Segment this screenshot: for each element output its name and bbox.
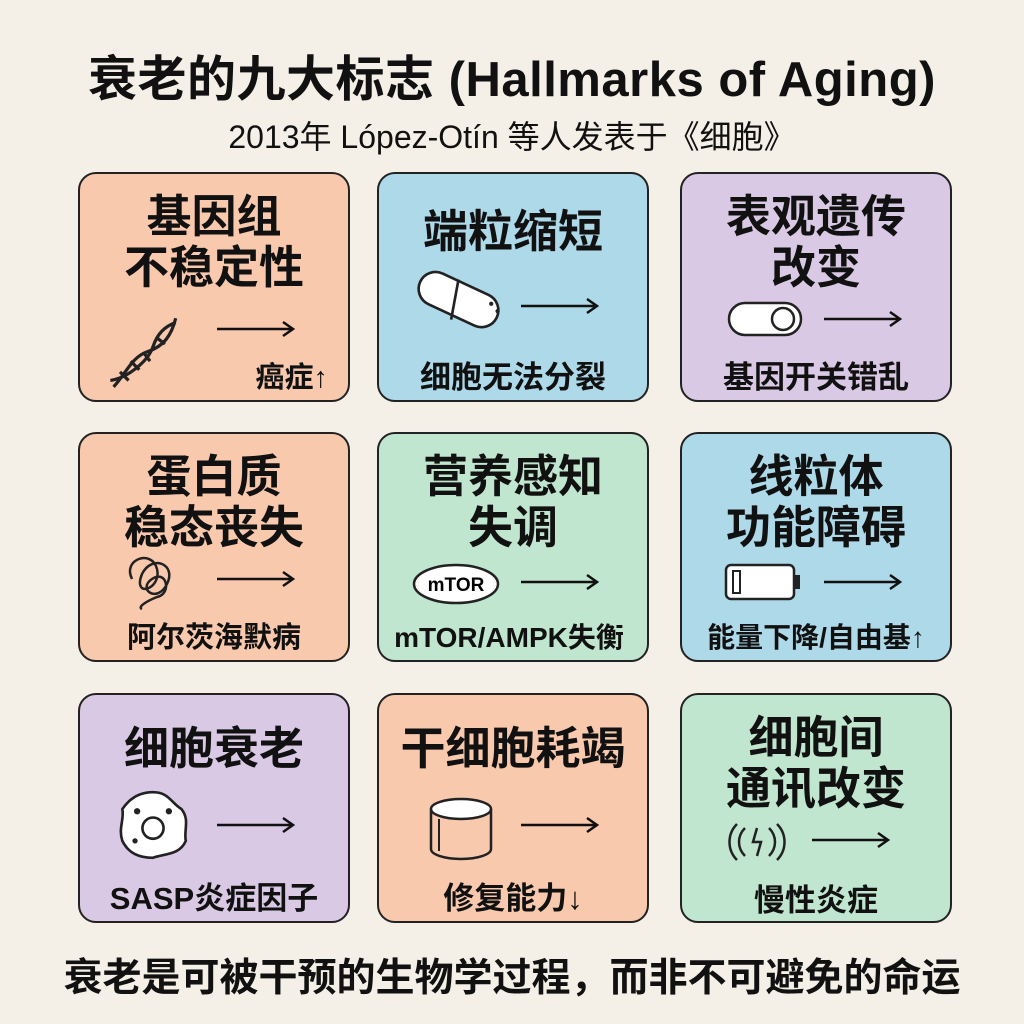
heading: 稳态丧失: [124, 502, 304, 553]
text: 能量下降/自由基↑: [707, 622, 925, 653]
panel: genome instability: [78, 172, 350, 402]
heading: 改变: [771, 242, 861, 293]
text: 修复能力↓: [443, 881, 583, 916]
heading: 线粒体: [748, 451, 884, 502]
text: 慢性炎症: [754, 883, 878, 918]
arrow: [824, 311, 902, 327]
arrow: [824, 574, 902, 590]
arrow: [217, 321, 296, 337]
heading: 细胞间: [748, 712, 884, 763]
panel: senescence: [78, 693, 350, 923]
footer statement: 衰老是可被干预的生物学过程，而非不可避免的命运: [63, 957, 960, 1000]
arrow: [812, 832, 890, 848]
text: SASP炎症因子: [110, 881, 318, 916]
text: 基因开关错乱: [723, 360, 909, 395]
title: 衰老的九大标志 (Hallmarks of Aging): [88, 53, 936, 107]
arrow: [521, 817, 600, 833]
subtitle: 2013年 López-Otín 等人发表于《细胞》: [228, 119, 796, 155]
icon: battery: [724, 564, 800, 600]
panel: stem cell exhaustion: [377, 693, 649, 923]
icon: capsule: [417, 270, 500, 328]
text: 细胞无法分裂: [420, 360, 606, 395]
panel: intercellular communication: [680, 693, 952, 923]
arrow: [521, 298, 600, 314]
arrow: [217, 817, 296, 833]
panel: epigenetic: [680, 172, 952, 402]
text: 癌症↑: [255, 362, 328, 394]
heading: 蛋白质: [146, 451, 282, 502]
panel: telomere: [377, 172, 649, 402]
icon: signal waves: [728, 823, 786, 861]
heading: 通讯改变: [726, 763, 906, 814]
icon: mTOR oval: mTOR: [428, 575, 485, 596]
heading: 干细胞耗竭: [400, 723, 626, 774]
icon: mTOR oval: [412, 564, 500, 604]
heading: [726, 712, 906, 814]
heading: 表观遗传: [726, 191, 906, 242]
text: mTOR/AMPK失衡: [394, 622, 624, 653]
heading: [124, 191, 304, 293]
heading: 营养感知: [423, 451, 603, 502]
text: 阿尔茨海默病: [127, 622, 301, 654]
icon: dna: [110, 318, 178, 388]
panel: nutrient sensing: [377, 432, 649, 662]
heading: [423, 451, 603, 553]
heading: [124, 451, 304, 553]
heading: 端粒缩短: [423, 206, 603, 257]
arrow: [521, 574, 600, 590]
heading: 失调: [468, 502, 558, 553]
heading: [726, 191, 906, 293]
arrow: [217, 571, 296, 587]
icon: empty dish: [430, 798, 492, 860]
panel: proteostasis: [78, 432, 350, 662]
heading: 基因组: [146, 191, 282, 242]
heading: [726, 451, 906, 553]
icon: switch: [728, 302, 802, 336]
panel: mitochondria: [680, 432, 952, 662]
heading: 细胞衰老: [124, 723, 304, 774]
heading: 功能障碍: [726, 502, 906, 553]
icon: tangle: [128, 556, 171, 610]
icon: senescent cell: [120, 790, 188, 860]
heading: 不稳定性: [124, 242, 304, 293]
